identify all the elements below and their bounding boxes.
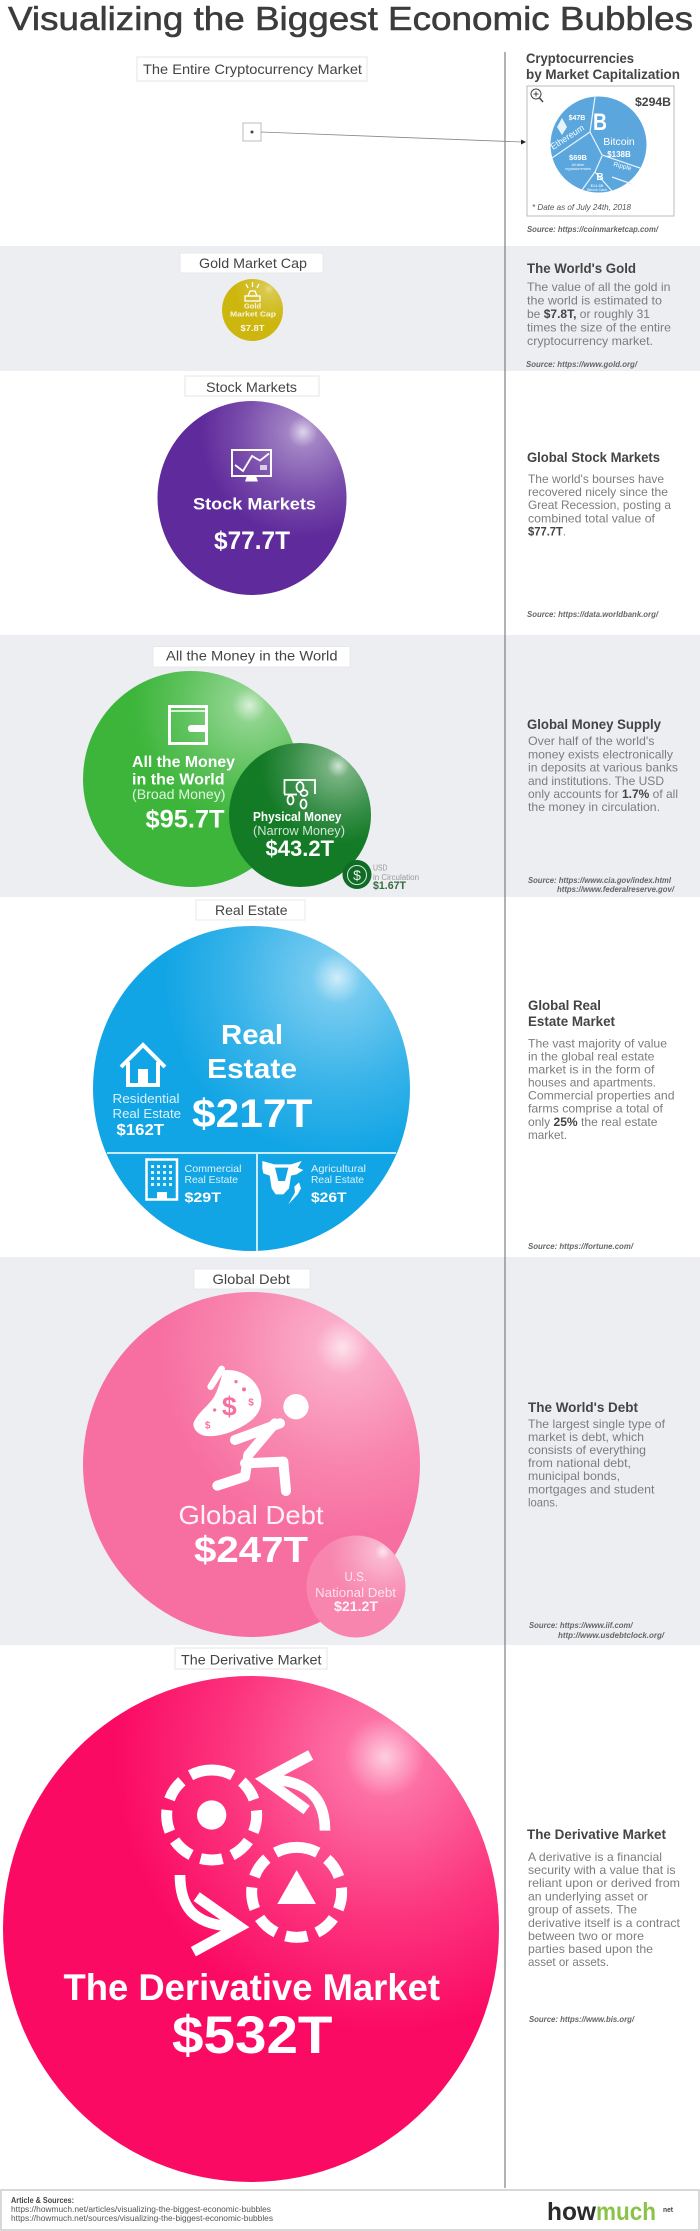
icon: cow and wheat bbox=[262, 1161, 303, 1204]
heading: global real estate market bbox=[528, 998, 615, 1029]
text block: gold: cryptocurrency market. bbox=[527, 334, 653, 348]
article and sources: https://howmuch.net/sources/visualizing-the-biggest-economic-bubbles bbox=[11, 2214, 273, 2223]
panel: stock markets bbox=[158, 376, 671, 619]
text block: derivative: an underlying asset or bbox=[528, 1890, 648, 1904]
bubble: real estate: Real Estate bbox=[311, 1174, 364, 1186]
bubble: derivative market: The Derivative Market bbox=[64, 1967, 440, 2008]
text block: debt bbox=[528, 1417, 666, 1510]
icon: derivative exchange bbox=[151, 1754, 358, 1953]
icon: wallet bbox=[169, 706, 207, 744]
bubble: real estate bbox=[93, 926, 410, 1251]
source: Source: https://www.bis.org/ bbox=[529, 2014, 635, 2024]
panel: cryptocurrency market bbox=[137, 51, 680, 234]
logo: howmuch.net bbox=[547, 2198, 674, 2226]
source: https://www.federalreserve.gov/ bbox=[557, 884, 675, 894]
bubble: real estate: $217T bbox=[192, 1092, 312, 1136]
text block: gold: the world is estimated to bbox=[527, 294, 662, 308]
text block: stock markets: combined total value of bbox=[528, 512, 656, 526]
bubble: broad money bbox=[83, 671, 299, 887]
label: the derivative market: The Derivative Market bbox=[181, 1652, 322, 1668]
logo: howmuch.net: much bbox=[596, 2198, 656, 2226]
icon: person carrying money bag bbox=[193, 1369, 309, 1491]
source: Source: https://data.worldbank.org/ bbox=[527, 609, 659, 619]
bubble: stock markets: $77.7T bbox=[214, 527, 290, 555]
pie chart: B bbox=[596, 172, 604, 183]
panel: derivative market bbox=[3, 1648, 681, 2182]
bubble: real estate: $162T bbox=[116, 1122, 164, 1139]
bubble: stock markets bbox=[158, 401, 346, 595]
text block: real estate: The vast majority of value bbox=[528, 1036, 667, 1050]
panel: global debt bbox=[83, 1269, 666, 1640]
pie chart: $14.6B bbox=[591, 183, 604, 188]
text block: derivative: A derivative is a financial bbox=[528, 1850, 662, 1864]
text block: gold bbox=[527, 280, 671, 348]
text block: debt: mortgages and student bbox=[528, 1482, 655, 1496]
panel: real estate bbox=[93, 900, 674, 1251]
icon: monitor chart bbox=[232, 450, 271, 482]
icon: house bbox=[121, 1045, 165, 1086]
text block: stock markets: recovered nicely since the bbox=[528, 485, 668, 499]
bubble: global debt bbox=[83, 1292, 420, 1637]
label: real estate: Real Estate bbox=[215, 902, 288, 918]
bubble: derivative market bbox=[3, 1676, 499, 2182]
date note: * Date as of July 24th, 2018 bbox=[532, 202, 631, 212]
text block: derivative: group of assets. The bbox=[528, 1902, 637, 1916]
text block: derivative: between two or more bbox=[528, 1929, 644, 1943]
bubble: gold: Gold bbox=[244, 302, 261, 310]
label: the derivative market bbox=[175, 1648, 327, 1669]
bubble: broad money: in the World bbox=[132, 772, 224, 788]
source: Source: https://www.gold.org/ bbox=[526, 359, 638, 369]
bubble: physical money: (Narrow Money) bbox=[253, 823, 345, 838]
bubble: gold bbox=[222, 279, 283, 341]
heading: cryptocurrencies: by Market Capitalization bbox=[526, 67, 680, 82]
source bbox=[528, 875, 675, 894]
text block: debt: consists of everything bbox=[528, 1443, 646, 1457]
bubble: real estate: Estate bbox=[207, 1053, 297, 1084]
text block: debt: from national debt, bbox=[528, 1456, 631, 1470]
text block: debt: market is debt, which bbox=[528, 1430, 644, 1444]
heading: the derivative market: The Derivative Market bbox=[527, 1827, 667, 1842]
footer bbox=[1, 2190, 699, 2230]
icon: office building bbox=[146, 1160, 177, 1200]
label: all the money in the world: All the Money in the World bbox=[166, 648, 338, 664]
text block: real estate: market. bbox=[528, 1128, 567, 1142]
pie chart: Ethereum bbox=[549, 123, 586, 152]
article and sources bbox=[11, 2196, 273, 2223]
text block: derivative: parties based upon the bbox=[528, 1942, 653, 1956]
bubble: us national debt bbox=[306, 1536, 406, 1638]
label: global debt bbox=[194, 1269, 310, 1289]
icon: gold bars bbox=[245, 282, 260, 301]
text block: real estate: farms comprise a total of bbox=[528, 1102, 664, 1116]
source: Source: https://fortune.com/ bbox=[528, 1241, 635, 1251]
icon: person carrying money bag: $ bbox=[248, 1398, 254, 1409]
pie chart: $47B bbox=[569, 115, 585, 122]
text block: gold: be $7.8T, or roughly 31 bbox=[527, 307, 650, 321]
text block: debt: The largest single type of bbox=[528, 1417, 666, 1431]
text block: money supply: the money in circulation. bbox=[528, 800, 660, 814]
label: real estate bbox=[196, 900, 305, 920]
label: all the money in the world bbox=[153, 646, 350, 667]
source: Source: https://www.cia.gov/index.html bbox=[528, 875, 672, 885]
heading: the world's gold: The World's Gold bbox=[527, 261, 636, 276]
icon: person carrying money bag: $ bbox=[205, 1420, 211, 1431]
text block: derivative: security with a value that is bbox=[528, 1863, 676, 1877]
source: http://www.usdebtclock.org/ bbox=[558, 1630, 666, 1640]
bubble: gold: $7.8T bbox=[240, 323, 265, 333]
bubble: physical money: Physical Money bbox=[253, 809, 342, 824]
text block: real estate bbox=[528, 1036, 674, 1142]
bubble: us national debt: National Debt bbox=[315, 1585, 396, 1600]
text block: stock markets: The world's bourses have bbox=[528, 472, 664, 486]
bubble: us national debt: $21.2T bbox=[334, 1598, 378, 1614]
label: the entire cryptocurrency market: The Entire Cryptocurrency Market bbox=[143, 61, 362, 77]
pie chart: $138B bbox=[607, 150, 631, 159]
bubble: broad money: (Broad Money) bbox=[132, 786, 226, 802]
article and sources: Article & Sources: bbox=[11, 2196, 74, 2205]
bubble: real estate: Commercial bbox=[184, 1163, 242, 1175]
bubble: usd in circulation: $ bbox=[353, 867, 361, 883]
bubble: derivative market: $532T bbox=[172, 2006, 332, 2065]
text block: debt: loans. bbox=[528, 1496, 558, 1510]
logo: howmuch.net: how bbox=[547, 2198, 597, 2226]
label: global debt: Global Debt bbox=[212, 1271, 290, 1287]
source: Source: https://www.iif.com/ bbox=[529, 1620, 634, 1630]
text block: money supply: money exists electronically bbox=[528, 748, 673, 762]
pie chart: Ripple bbox=[613, 161, 632, 172]
bubble: physical money: $43.2T bbox=[266, 836, 335, 861]
bubble: global debt: $247T bbox=[194, 1529, 308, 1570]
text block: money supply: in deposits at various banks bbox=[528, 760, 678, 774]
source bbox=[529, 1620, 666, 1640]
text block: money supply: and institutions. The USD bbox=[528, 774, 664, 788]
arrow: to crypto pie bbox=[261, 132, 526, 144]
text block: debt: municipal bonds, bbox=[528, 1469, 620, 1483]
text block: derivative: reliant upon or derived from bbox=[528, 1876, 680, 1890]
label: usd in circulation: in Circulation bbox=[373, 873, 419, 882]
text block: money supply: Over half of the world's bbox=[528, 734, 654, 748]
label: the entire cryptocurrency market bbox=[137, 57, 367, 81]
pie chart card bbox=[527, 86, 674, 216]
text block: gold: times the size of the entire bbox=[527, 320, 671, 334]
label: usd in circulation: $1.67T bbox=[373, 880, 406, 892]
article and sources: https://howmuch.net/articles/visualizing-the-biggest-economic-bubbles bbox=[11, 2205, 271, 2214]
divider lines bbox=[107, 1153, 396, 1251]
icon: person carrying money bag: $ bbox=[222, 1392, 237, 1422]
bubble: gold: Market Cap bbox=[230, 310, 276, 318]
text block: derivative bbox=[528, 1850, 681, 1969]
text block: money supply: only accounts for 1.7% of all bbox=[528, 787, 678, 801]
text block: stock markets: $77.7T. bbox=[528, 524, 566, 538]
label: gold market cap: Gold Market Cap bbox=[199, 255, 307, 271]
pie chart: B bbox=[593, 109, 607, 136]
pie chart: $69B bbox=[569, 153, 588, 162]
heading: global money supply: Global Money Supply bbox=[527, 717, 661, 732]
text block: gold: The value of all the gold in bbox=[527, 280, 670, 294]
logo: howmuch.net: net bbox=[663, 2207, 674, 2214]
total value: $294B bbox=[635, 95, 671, 109]
pie chart: cryptocurrencies bbox=[565, 167, 591, 171]
heading: cryptocurrencies bbox=[526, 51, 680, 82]
text block: real estate: only 25% the real estate bbox=[528, 1115, 658, 1129]
bubble: real estate: $26T bbox=[311, 1189, 347, 1205]
label: stock markets: Stock Markets bbox=[206, 379, 297, 395]
pie chart: Bitcoin Cash bbox=[587, 188, 607, 192]
text block: real estate: Commercial properties and bbox=[528, 1088, 674, 1102]
heading: global real estate market: Estate Market bbox=[528, 1014, 615, 1029]
bubble: real estate: Real bbox=[221, 1019, 283, 1050]
label: usd in circulation bbox=[373, 864, 419, 892]
label: stock markets bbox=[185, 376, 319, 396]
heading: the world's debt: The World's Debt bbox=[528, 1400, 638, 1415]
text block: real estate: houses and apartments. bbox=[528, 1076, 656, 1090]
pie chart: Bitcoin bbox=[603, 136, 635, 148]
text block: stock markets bbox=[528, 472, 671, 538]
panel: money supply bbox=[83, 646, 678, 894]
bubble: us national debt: U.S. bbox=[344, 1569, 367, 1584]
bubble: real estate: Agricultural bbox=[311, 1163, 366, 1175]
bubble: global debt: Global Debt bbox=[178, 1500, 324, 1530]
text block: real estate: in the global real estate bbox=[528, 1050, 655, 1064]
label: gold market cap bbox=[180, 253, 323, 273]
bubble: broad money: $95.7T bbox=[146, 806, 224, 834]
heading: global real estate market: Global Real bbox=[528, 998, 601, 1013]
text block: money supply bbox=[528, 734, 678, 814]
title: Visualizing the Biggest Economic Bubbles bbox=[8, 0, 693, 37]
label: usd in circulation: USD bbox=[373, 864, 388, 872]
text block: stock markets: Great Recession, posting a bbox=[528, 498, 671, 512]
bubble: real estate: $29T bbox=[184, 1189, 221, 1205]
icon: magnifier bbox=[531, 89, 543, 102]
bubble: usd in circulation bbox=[342, 860, 372, 889]
panel: gold bbox=[180, 253, 671, 369]
tiny crypto bubble bbox=[243, 123, 261, 141]
text block: derivative: derivative itself is a contract bbox=[528, 1916, 681, 1930]
source: Source: https://coinmarketcap.com/ bbox=[527, 224, 659, 234]
bubble: stock markets: Stock Markets bbox=[193, 494, 316, 514]
heading: cryptocurrencies: Cryptocurrencies bbox=[526, 51, 634, 66]
bubble: real estate: Residential bbox=[112, 1092, 180, 1106]
pie chart bbox=[549, 96, 646, 192]
icon: banknote and coins bbox=[284, 780, 315, 808]
bubble: physical money bbox=[229, 743, 371, 887]
heading: global stock markets: Global Stock Markets bbox=[527, 450, 660, 465]
bubble: real estate: Real Estate bbox=[112, 1107, 181, 1121]
pie chart: All other bbox=[572, 163, 585, 167]
text block: real estate: market is in the form of bbox=[528, 1062, 655, 1076]
text block: derivative: asset or assets. bbox=[528, 1955, 609, 1969]
bubble: broad money: All the Money bbox=[132, 754, 235, 771]
bubble: real estate: Real Estate bbox=[184, 1174, 238, 1186]
